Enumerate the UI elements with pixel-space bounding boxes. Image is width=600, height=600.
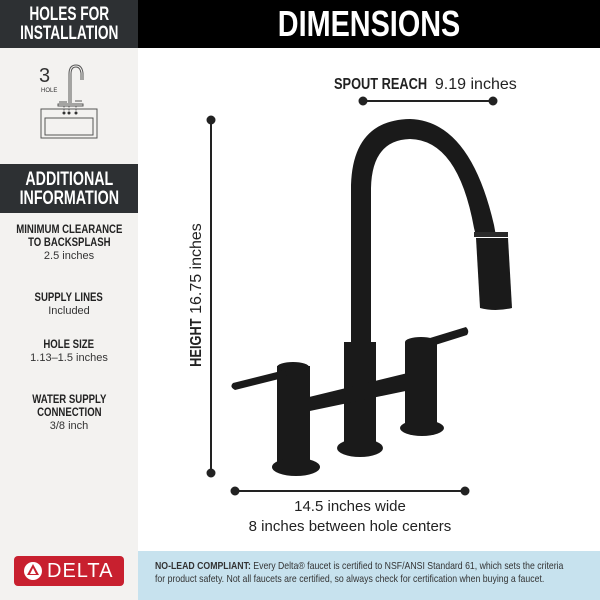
info: clearance: 2.5 inches <box>44 250 94 262</box>
text: 16.75 inches <box>188 223 205 314</box>
icon: 3 hole sink: 3 <box>39 65 50 87</box>
title: dimensions <box>138 0 600 48</box>
footer: compliance note: for product safety. Not all faucets are certified, so always check for certification when buying a faucet. <box>155 573 544 585</box>
info: water supply: CONNECTION <box>37 405 101 419</box>
info: clearance: MINIMUM CLEARANCE <box>16 222 122 236</box>
info: water supply: WATER SUPPLY <box>32 392 106 406</box>
info: hole size <box>30 337 108 364</box>
info: water supply: 3/8 inch <box>50 420 88 432</box>
label: width: 14.5 inches wide <box>294 498 406 515</box>
heading: holes for installation: INSTALLATION <box>20 23 118 44</box>
text: HEIGHT <box>188 318 205 367</box>
heading: additional information <box>0 164 138 213</box>
sidebar background <box>0 0 138 600</box>
info: water supply <box>32 392 106 432</box>
heading: holes for installation: HOLES FOR <box>29 4 109 25</box>
info: clearance <box>16 222 122 262</box>
label: width: 8 inches between hole centers <box>249 518 451 535</box>
info: hole size: HOLE SIZE <box>44 337 94 351</box>
logo: delta: DELTA <box>47 560 114 582</box>
heading: holes for installation <box>0 0 138 48</box>
heading: additional information: ADDITIONAL <box>25 169 113 190</box>
info: hole size: 1.13–1.5 inches <box>30 352 108 364</box>
label: width <box>249 498 451 535</box>
label: spout reach: SPOUT REACH <box>334 76 427 93</box>
label: spout reach: 9.19 inches <box>435 76 517 93</box>
info: supply lines: SUPPLY LINES <box>35 290 103 304</box>
icon: 3 hole sink <box>39 64 98 138</box>
title: dimensions: DIMENSIONS <box>278 3 460 44</box>
heading: additional information: INFORMATION <box>19 188 119 209</box>
icon: 3 hole sink: HOLE <box>41 88 57 94</box>
footer: compliance note: NO-LEAD COMPLIANT: Every Delta® faucet is certified to NSF/ANSI Standard 61, which sets the criteria <box>155 560 563 572</box>
logo: delta <box>14 556 124 586</box>
info: supply lines <box>34 290 103 317</box>
footer: compliance note <box>138 551 600 600</box>
label: height <box>188 223 205 367</box>
info: clearance: TO BACKSPLASH <box>28 235 110 249</box>
label: spout reach <box>334 76 517 93</box>
info: supply lines: Included <box>48 305 90 317</box>
